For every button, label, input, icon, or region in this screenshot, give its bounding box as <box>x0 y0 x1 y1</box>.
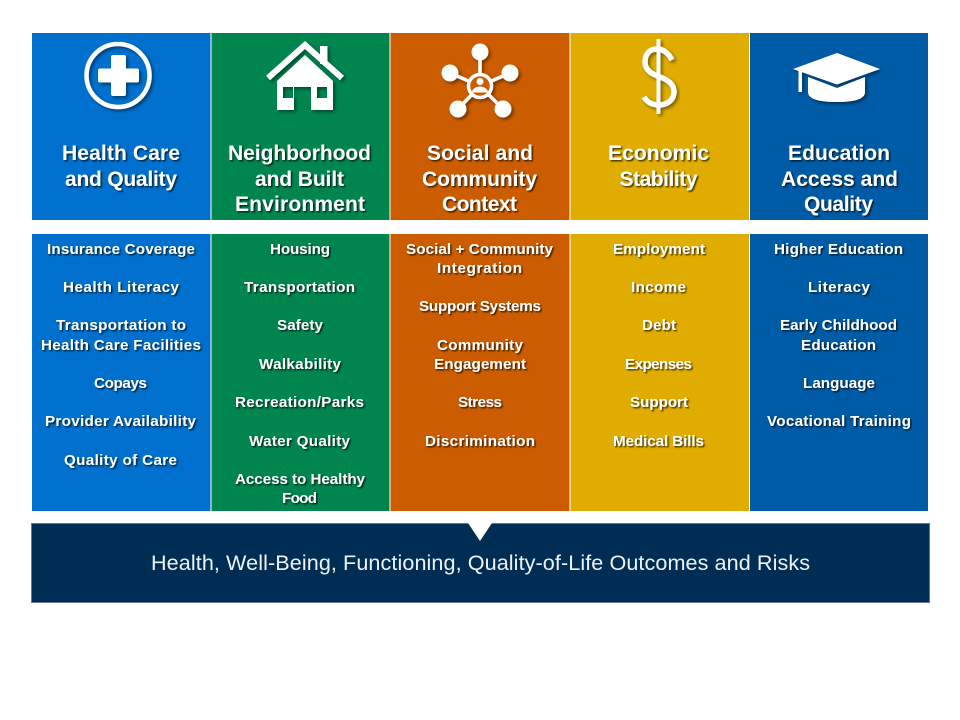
list: economic stability factors: Employment <box>613 241 705 258</box>
list: economic stability factors <box>613 241 705 450</box>
panel: social and community context header <box>390 33 570 220</box>
icon: graduation cap <box>793 53 880 102</box>
icon: social network with person hub <box>442 44 518 118</box>
icon: house <box>268 45 342 110</box>
heading: Health Care and Quality <box>62 142 180 191</box>
icon: medical cross in circle <box>86 44 150 107</box>
list: education factors: Education <box>801 337 876 354</box>
list: neighborhood factors: Transportation <box>244 279 355 296</box>
heading: Education Access and Quality: Quality <box>804 193 873 216</box>
list: health care factors <box>41 241 201 469</box>
list: education factors: Literacy <box>808 279 871 296</box>
heading: Neighborhood and Built Environment: Environment <box>235 193 365 216</box>
heading: Social and Community Context <box>422 142 537 216</box>
list: neighborhood factors: Safety <box>277 317 324 334</box>
heading: Social and Community Context: Context <box>442 193 517 216</box>
list: education factors: Vocational Training <box>767 413 911 430</box>
list: health care factors: Provider Availability <box>45 413 197 430</box>
heading: Education Access and Quality: Access and <box>781 168 898 191</box>
list: health care factors: Copays <box>94 375 147 392</box>
list: neighborhood factors: Housing <box>270 241 330 258</box>
panel: economic stability header <box>570 33 749 220</box>
list: neighborhood factors: Water Quality <box>249 433 351 450</box>
heading: Health Care and Quality: Health Care <box>62 142 180 165</box>
list: social and community factors: Social + Community <box>406 241 554 258</box>
list: neighborhood factors <box>235 241 366 507</box>
list: health care factors: Health Care Facilities <box>41 337 201 354</box>
list: neighborhood factors: Recreation/Parks <box>235 394 364 411</box>
panel: health care and quality factors <box>32 234 210 511</box>
heading: Neighborhood and Built Environment: Neighborhood <box>228 142 371 165</box>
panel: education factors <box>750 234 928 511</box>
banner text: Health, Well-Being, Functioning, Quality-of-Life Outcomes and Risks <box>151 550 810 575</box>
list: education factors <box>767 241 911 430</box>
heading: Economic Stability: Stability <box>620 168 698 191</box>
icon: dollar sign <box>644 39 674 114</box>
heading: Social and Community Context: Social and <box>427 142 533 165</box>
list: economic stability factors: Debt <box>642 317 676 334</box>
list: health care factors: Transportation to <box>56 317 186 334</box>
heading: Economic Stability <box>608 142 709 191</box>
heading: Health Care and Quality: and Quality <box>65 168 177 191</box>
arrow: pointer notch <box>468 523 492 541</box>
list: social and community factors: Community <box>437 337 524 354</box>
list: health care factors: Insurance Coverage <box>47 241 195 258</box>
list: health care factors: Quality of Care <box>64 452 177 469</box>
list: education factors: Higher Education <box>774 241 903 258</box>
list: education factors: Early Childhood <box>780 317 897 334</box>
heading: Social and Community Context: Community <box>422 168 537 191</box>
list: social and community factors: Engagement <box>434 356 526 373</box>
list: social and community factors: Discrimination <box>425 433 535 450</box>
list: social and community factors: Stress <box>458 394 502 411</box>
panel: health care and quality header <box>32 33 210 220</box>
panel: education access and quality header <box>750 33 928 220</box>
banner: outcomes <box>32 523 930 602</box>
list: social and community factors: Integration <box>437 260 522 277</box>
heading: Neighborhood and Built Environment: and Built <box>255 168 344 191</box>
list: economic stability factors: Support <box>630 394 688 411</box>
panel: social and community factors <box>390 234 570 511</box>
heading: Education Access and Quality <box>781 142 898 216</box>
list: economic stability factors: Medical Bills <box>613 433 704 450</box>
panel: neighborhood factors <box>212 234 390 511</box>
list: education factors: Language <box>803 375 875 392</box>
list: neighborhood factors: Access to Healthy <box>235 471 366 488</box>
heading: Neighborhood and Built Environment <box>228 142 371 216</box>
list: social and community factors: Support Systems <box>419 298 541 315</box>
heading: Education Access and Quality: Education <box>788 142 890 165</box>
heading: Economic Stability: Economic <box>608 142 709 165</box>
panel: neighborhood and built environment header <box>212 33 390 220</box>
list: health care factors: Health Literacy <box>63 279 180 296</box>
list: economic stability factors: Income <box>631 279 686 296</box>
list: economic stability factors: Expenses <box>625 356 692 373</box>
panel: economic stability factors <box>570 234 749 511</box>
list: neighborhood factors: Walkability <box>259 356 342 373</box>
list: neighborhood factors: Food <box>282 490 317 507</box>
list: social and community factors <box>406 241 554 450</box>
